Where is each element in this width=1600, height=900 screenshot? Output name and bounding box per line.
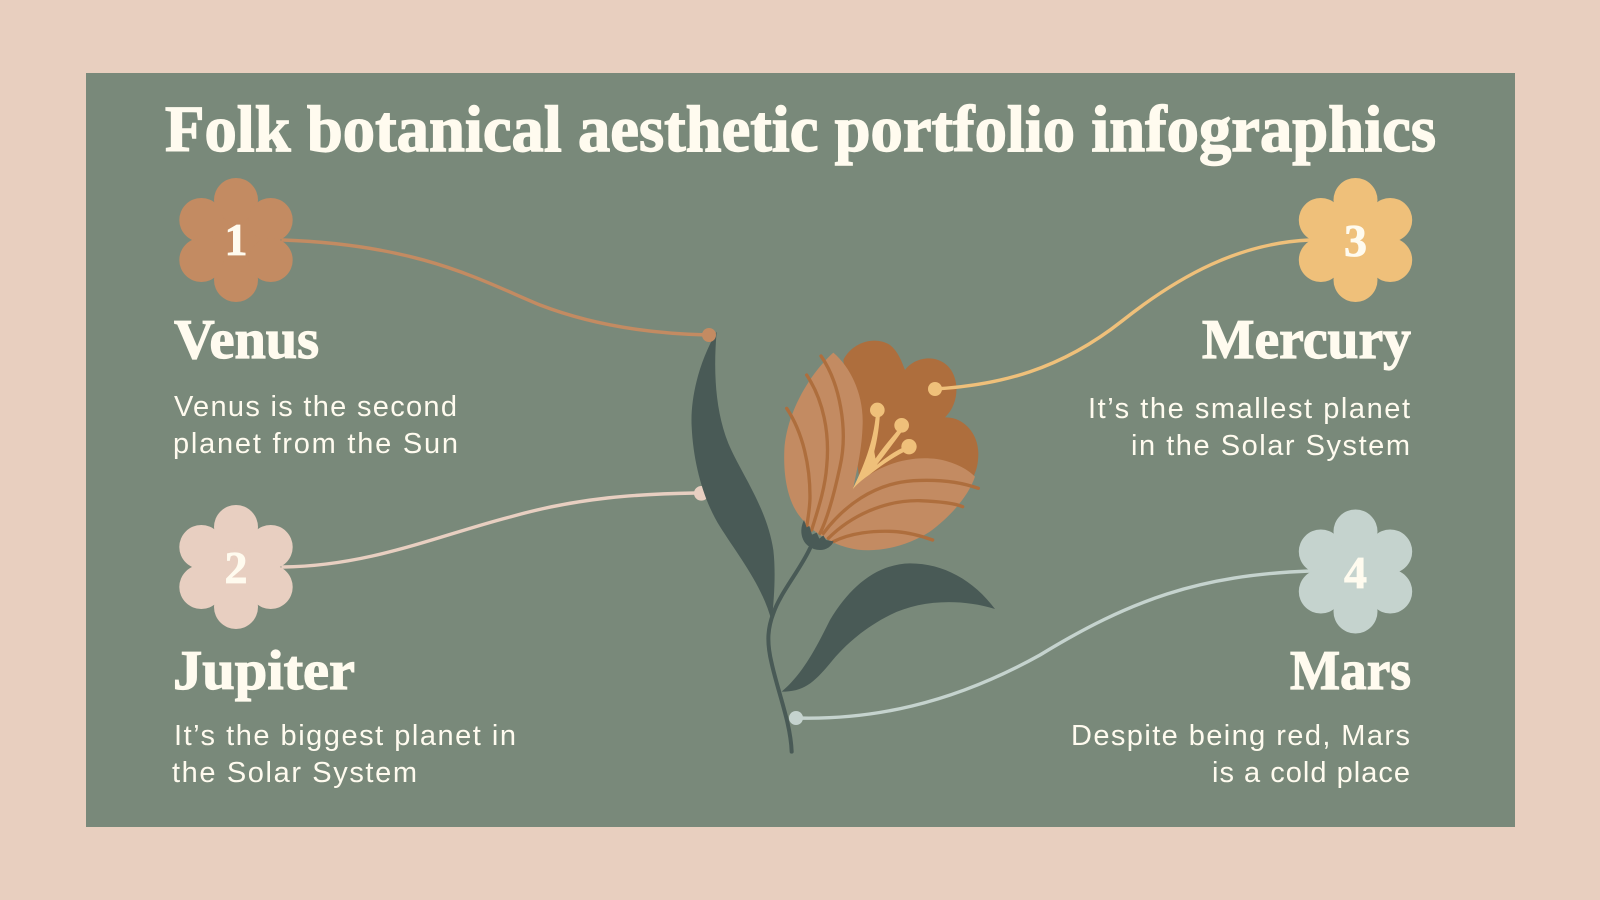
heading: Venus: Venus	[174, 309, 319, 371]
connector: Venus	[283, 240, 716, 342]
badge 4	[1299, 510, 1412, 634]
text: Mercury description: It’s the smallest planet	[1088, 393, 1410, 425]
badge 2	[179, 505, 293, 629]
plant illustration	[691, 332, 995, 752]
lower right leaf	[782, 563, 995, 692]
text: Venus description: planet from the Sun	[173, 428, 458, 460]
text: Jupiter description	[172, 720, 516, 789]
connector: Mercury	[928, 240, 1310, 396]
petal veins	[787, 356, 978, 542]
connector dot: Jupiter	[694, 486, 709, 501]
badge 1	[179, 178, 293, 302]
heading: Mercury: Mercury	[1202, 309, 1411, 371]
connector: Mars	[789, 571, 1310, 725]
stamen base	[853, 447, 877, 489]
flower back petal	[843, 341, 978, 483]
flower front petals	[784, 353, 975, 550]
stem	[768, 548, 810, 752]
text: Mars description	[1071, 720, 1410, 789]
main panel	[86, 73, 1515, 827]
number 3: 3	[1344, 215, 1367, 266]
text: Mars description: Despite being red, Mars	[1071, 720, 1410, 752]
badge 3	[1299, 178, 1412, 302]
calyx	[801, 520, 834, 550]
number 4: 4	[1344, 547, 1367, 598]
number 1: 1	[224, 214, 248, 265]
text: Venus description: Venus is the second	[174, 391, 457, 423]
heading: Mars: Mars	[1290, 640, 1411, 702]
text: Mercury description	[1088, 393, 1410, 462]
left leaf	[691, 332, 775, 622]
stamens	[853, 403, 917, 489]
text: Jupiter description: the Solar System	[172, 757, 417, 789]
connector: Jupiter	[283, 493, 696, 567]
text: Jupiter description: It’s the biggest planet in	[174, 720, 516, 752]
text: Mars description: is a cold place	[1212, 757, 1410, 789]
number 2: 2	[224, 542, 248, 593]
text: Venus description	[173, 391, 458, 460]
title: Folk botanical aesthetic portfolio infographics	[165, 93, 1436, 166]
heading: Jupiter: Jupiter	[173, 640, 355, 702]
text: Mercury description: in the Solar System	[1131, 430, 1410, 462]
